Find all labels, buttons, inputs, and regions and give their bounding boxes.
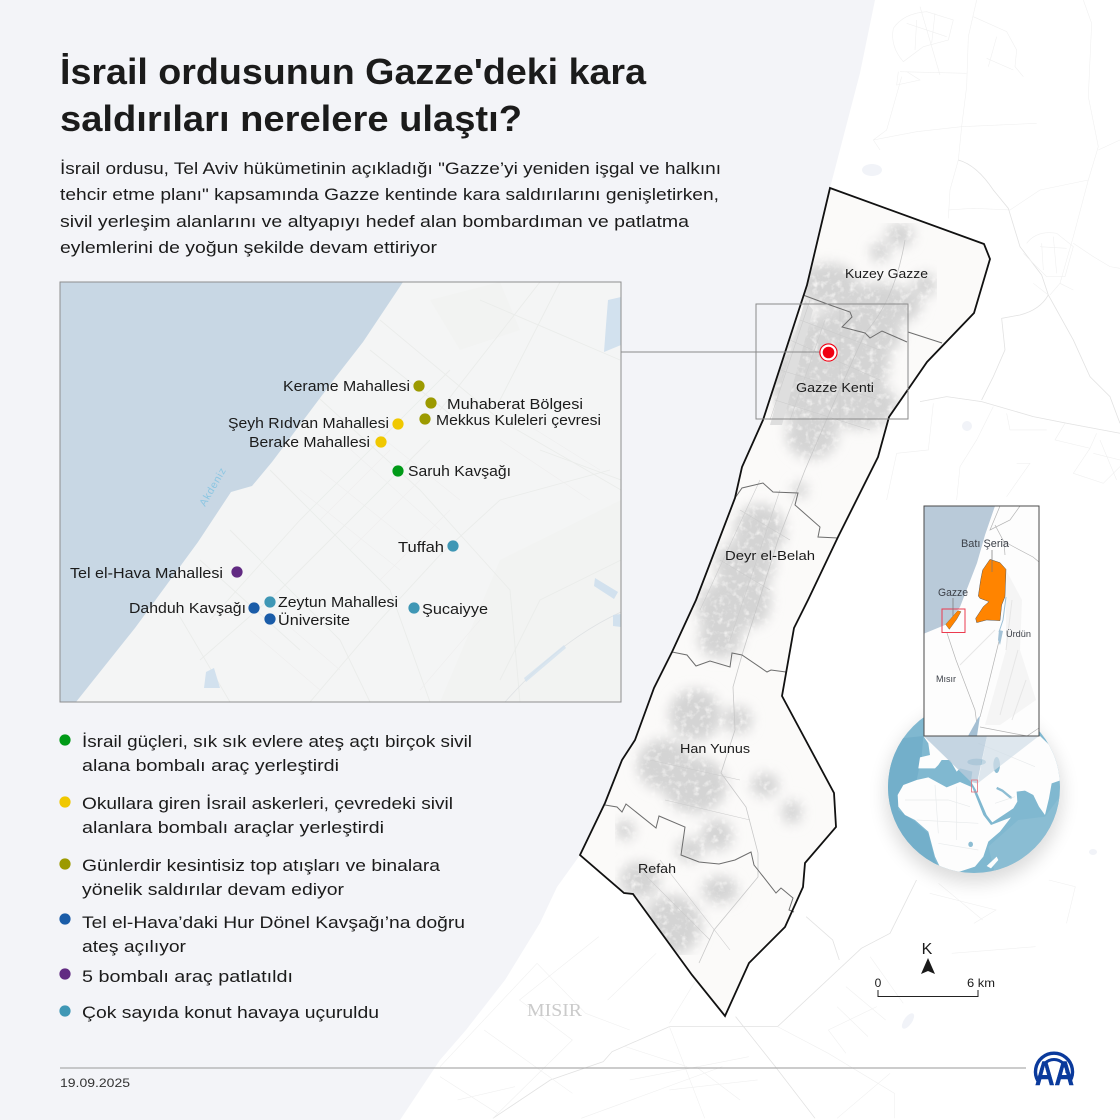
scale bar: [875, 976, 995, 996]
location points and labels: Muhaberat Bölgesi: [447, 397, 583, 413]
legend item: olive: Günlerdir kesintisiz top atışları ve binalara: [82, 857, 441, 875]
marker: red target: [820, 344, 837, 361]
panel: regional locator map: Gazze: [938, 587, 968, 599]
intro text: [60, 159, 721, 257]
legend item: blue: Tel el-Hava’daki Hur Dönel Kavşağı’na doğru: [82, 914, 465, 932]
map: Gaza Strip: Deyr el-Belah: [725, 548, 815, 563]
location points and labels: Üniversite: [278, 611, 350, 629]
inland seas: [997, 788, 1012, 798]
lake marks: [862, 164, 1097, 1031]
location points and labels: Tuffah: [398, 540, 444, 556]
governorate borders: [803, 295, 942, 343]
scale bar: 6 km: [967, 976, 995, 990]
north arrow: [921, 941, 935, 974]
label: Akdeniz: Akdeniz: [197, 465, 229, 508]
location points and labels: Kerame Mahallesi: [283, 379, 410, 395]
darker ocean rim: [888, 736, 938, 865]
legend item: olive: yönelik saldırılar devam ediyor: [82, 881, 345, 899]
location points and labels: [70, 379, 601, 629]
legend item: yellow: Okullara giren İsrail askerleri, çevredeki sivil: [82, 794, 453, 813]
inset roads: [170, 320, 621, 702]
map: Gaza Strip: Han Yunus: [680, 741, 751, 756]
panel: detail map of Gaza City: [60, 282, 621, 702]
ponds: [204, 297, 621, 688]
locator box and leader line: [621, 304, 908, 419]
intro text: eylemlerini de yoğun şekilde devam ettiriyor: [60, 238, 437, 257]
location points and labels: Şucaiyye: [422, 602, 488, 618]
location points and labels: Zeytun Mahallesi: [278, 595, 398, 611]
location points and labels: Dahduh Kavşağı: [129, 601, 246, 617]
legend item: blue: [59, 913, 465, 956]
map: Gaza Strip: [580, 188, 990, 1016]
legend item: green: İsrail güçleri, sık sık evlere ateş açtı birçok sivil: [82, 732, 472, 751]
intro text: tehcir etme planı" kapsamında Gazze kentinde kara saldırılarını genişletirken,: [60, 185, 719, 204]
sea: [923, 506, 995, 634]
background roads: right side: [873, 0, 1120, 500]
location points and labels: Tel el-Hava Mahallesi: [70, 566, 223, 582]
map: Gaza Strip: Refah: [638, 861, 676, 876]
intro text: sivil yerleşim alanlarını ve altyapıyı hedef alan bombardıman ve patlatma: [60, 212, 690, 231]
Jordan river and Dead Sea: [999, 597, 1006, 632]
legend: [59, 732, 472, 1022]
terrain: [985, 570, 1036, 725]
coastal band of Gaza City: [770, 300, 813, 425]
urban areas: [615, 223, 937, 963]
location points and labels: Saruh Kavşağı: [408, 464, 511, 480]
logo: AA: AA: [1035, 1055, 1074, 1093]
legend item: olive: [59, 857, 441, 899]
left panel background: [0, 0, 875, 1120]
strip outline: [580, 188, 990, 1016]
sea: [60, 282, 403, 702]
strip roads: [640, 300, 880, 950]
overlay cone: [924, 736, 987, 783]
label: MISIR: MISIR: [527, 1000, 582, 1020]
title: saldırıları nerelere ulaştı?: [60, 98, 522, 139]
West Bank and Gaza: [946, 559, 1006, 629]
map: Gaza Strip: Gazze Kenti: [796, 380, 874, 395]
panel: regional locator map: Ürdün: [1006, 629, 1031, 639]
governorate labels: Kuzey Gazze: [845, 266, 928, 281]
location points and labels: Mekkus Kuleleri çevresi: [436, 413, 601, 429]
soft terrain: [430, 282, 621, 702]
main roads: [699, 240, 905, 963]
legend item: yellow: [59, 794, 453, 837]
legend item: teal: Çok sayıda konut havaya uçuruldu: [82, 1004, 379, 1022]
title: [60, 51, 647, 139]
land: [898, 777, 1011, 873]
intro text: İsrail ordusu, Tel Aviv hükümetinin açıkladığı "Gazze’yi yeniden işgal ve halkını: [60, 159, 721, 178]
location points and labels: Şeyh Rıdvan Mahallesi: [228, 416, 389, 432]
small red box on globe: [972, 780, 978, 792]
title: İsrail ordusunun Gazze'deki kara: [60, 51, 647, 92]
legend item: green: alana bombalı araç yerleştirdi: [82, 757, 339, 775]
panel: regional locator map: Mısır: [936, 674, 956, 684]
strip fill: [580, 188, 990, 1016]
footer rule: [60, 1067, 1026, 1069]
legend item: yellow: alanlara bombalı araçlar yerleştirdi: [82, 819, 384, 837]
globe: [885, 701, 1065, 883]
scale bar: 0: [875, 976, 882, 990]
borders: [905, 757, 1035, 850]
north arrow: K: [922, 941, 933, 958]
panel: regional locator map: [923, 506, 1039, 736]
background roads: bottom: [440, 880, 1075, 1118]
borders: [947, 506, 1039, 736]
legend item: blue: ateş açılıyor: [82, 938, 187, 956]
locator labels: Batı Şeria: [961, 538, 1010, 550]
legend item: purple: 5 bombalı araç patlatıldı: [82, 968, 293, 986]
legend item: green: [59, 732, 472, 775]
location points and labels: Berake Mahallesi: [249, 435, 370, 451]
date: 19.09.2025: [60, 1076, 130, 1090]
